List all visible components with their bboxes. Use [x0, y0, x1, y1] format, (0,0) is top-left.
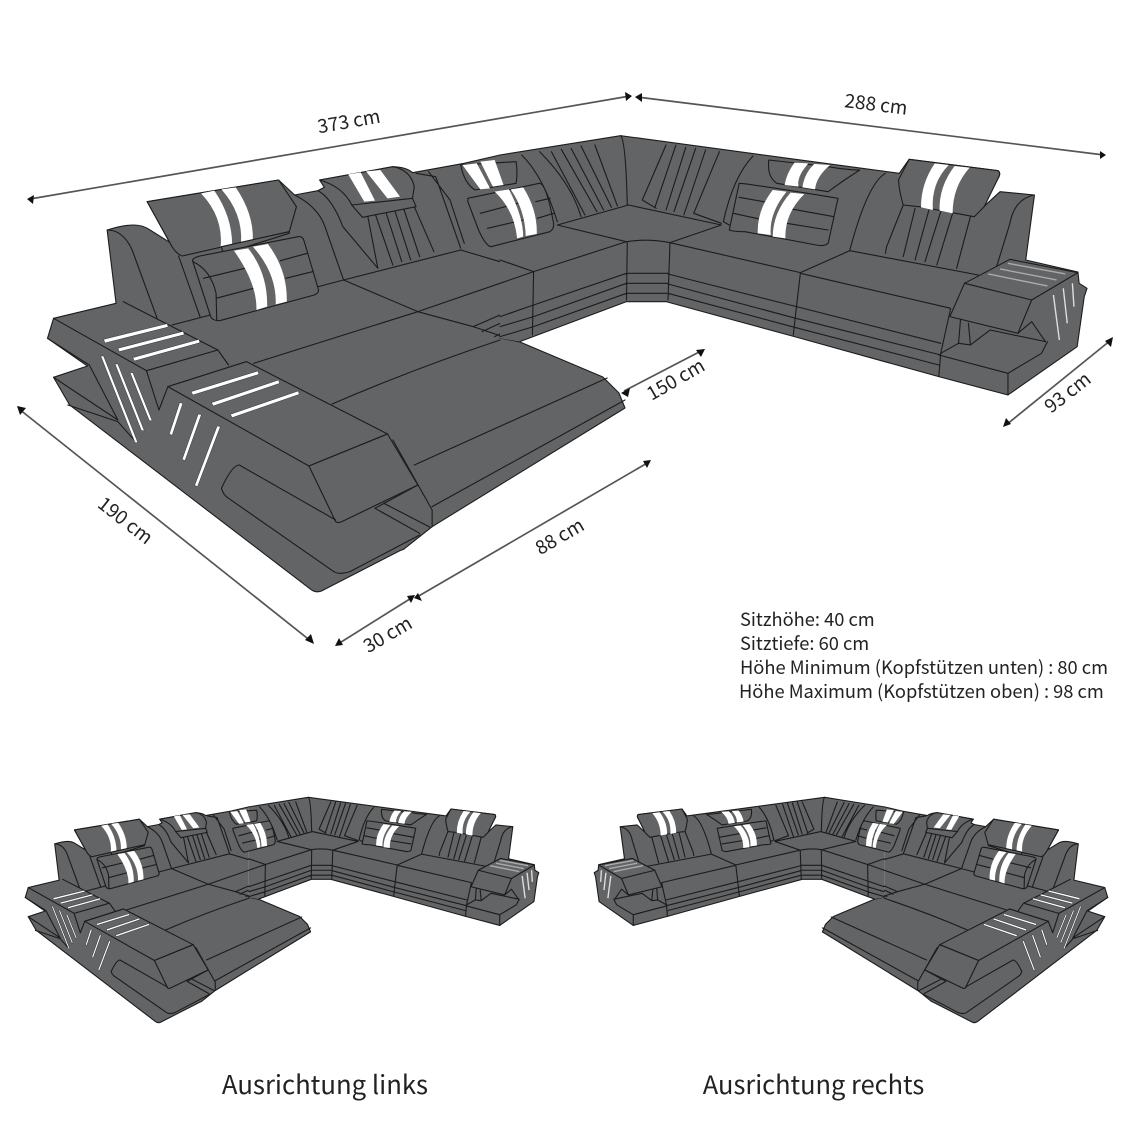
dimension: 373 cm: 373 cm: [315, 102, 382, 139]
caption: left orientation: Ausrichtung links: [222, 1065, 428, 1102]
dimension: 93 cm: [1003, 337, 1113, 427]
dimension: 288 cm: 288 cm: [843, 86, 909, 121]
dimension: 93 cm: 93 cm: [1038, 365, 1096, 419]
dimension: 190 cm: 190 cm: [93, 490, 159, 550]
dimension: 288 cm: [635, 86, 1106, 159]
specifications text: [739, 606, 1108, 704]
dimension: 373 cm: [27, 92, 632, 204]
dimension: 30 cm: 30 cm: [358, 609, 417, 659]
small sofa: left orientation: [25, 797, 539, 1023]
dimension: 190 cm: [17, 406, 314, 644]
specifications text: Höhe Minimum (Kopfstützen unten) : 80 cm: [740, 654, 1108, 680]
caption: right orientation: Ausrichtung rechts: [703, 1066, 924, 1102]
main sofa drawing: [47, 136, 1087, 592]
dimension: 88 cm: 88 cm: [530, 511, 589, 561]
specifications text: Sitzhöhe: 40 cm: [740, 606, 875, 632]
specifications text: Sitztiefe: 60 cm: [740, 630, 869, 656]
dimension: 88 cm: [414, 460, 651, 601]
dimension: 150 cm: 150 cm: [641, 351, 709, 406]
small sofa: right orientation: [594, 797, 1108, 1023]
specifications text: Höhe Maximum (Kopfstützen oben) : 98 cm: [739, 678, 1104, 704]
dimension: 30 cm: [335, 595, 417, 659]
